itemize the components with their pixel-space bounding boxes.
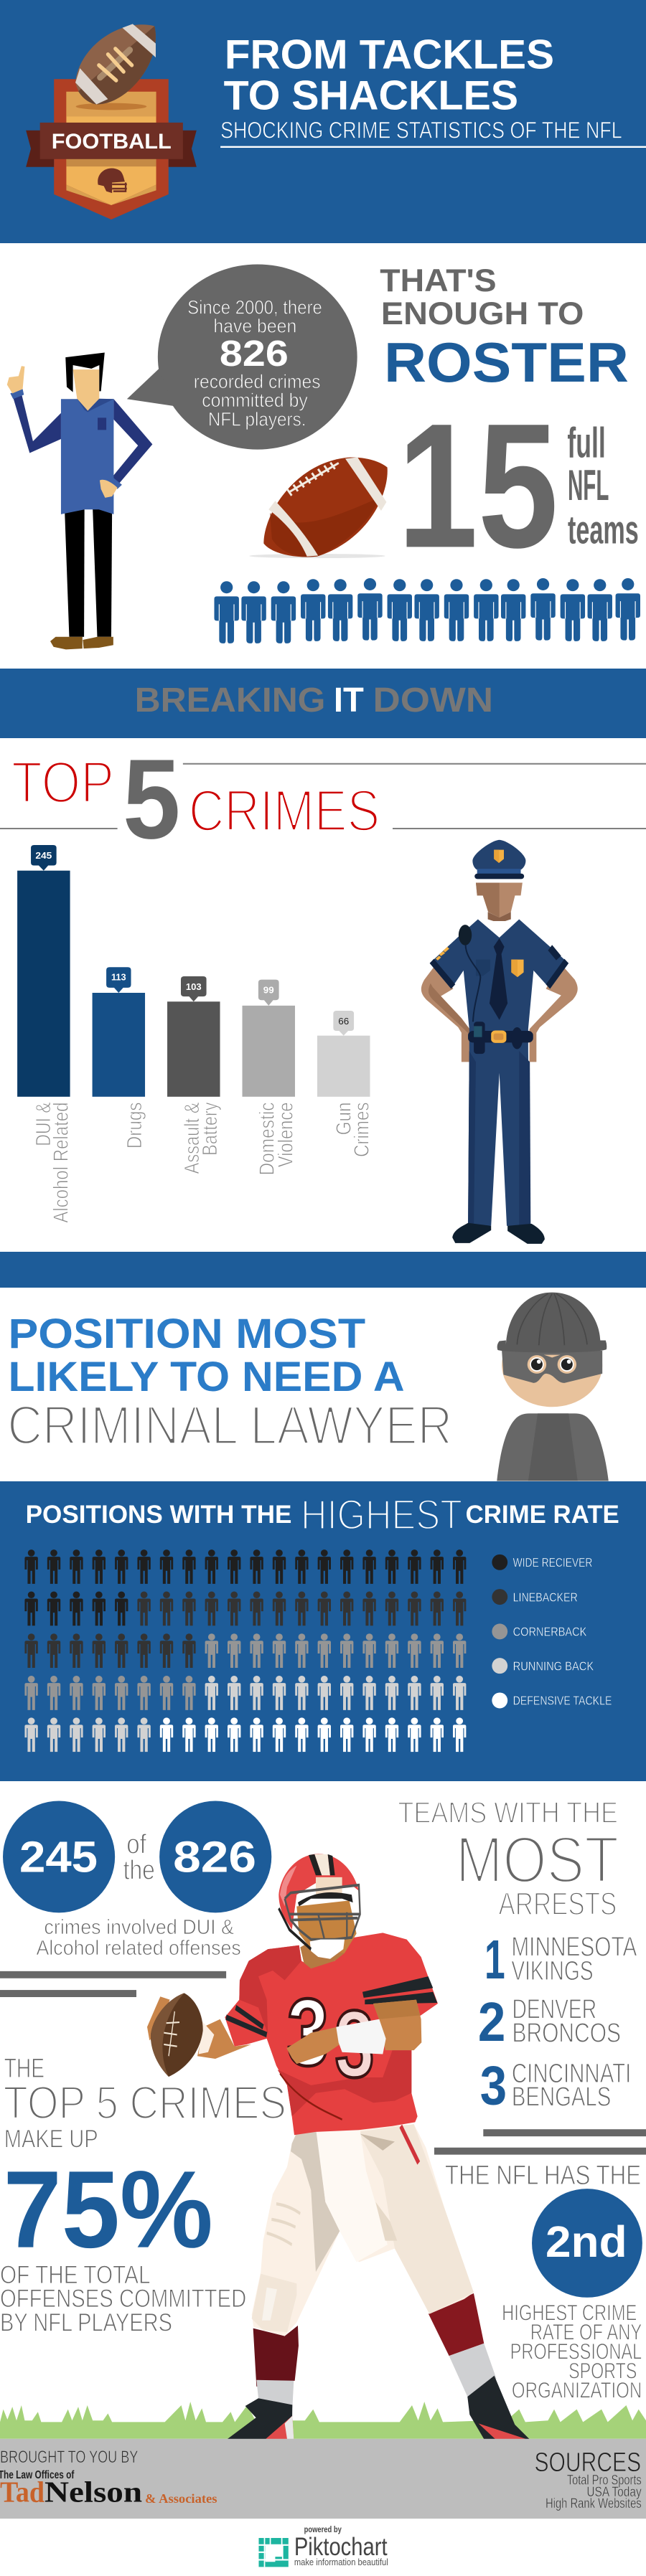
heading: positions with the highest crime rate (26, 1491, 619, 1538)
callout: teams with the most arrests: 3 (480, 2054, 507, 2116)
callout: teams with the most arrests (398, 1797, 646, 2155)
heading: top 5 crimes (11, 736, 380, 862)
full NFL teams: NFL (568, 461, 609, 509)
callout: 245 of the 826: crimes involved DUI & (44, 1917, 234, 1939)
callout: 245 of the 826: 245 (19, 1832, 98, 1882)
logo: powered by Piktochart: make information beautiful (294, 2557, 388, 2568)
heading: breaking it down: DOWN (373, 680, 493, 719)
bar: assault and battery 103: Battery (197, 1102, 221, 1156)
illustration: man in blue shirt (7, 352, 152, 649)
callout: NFL has the 2nd highest crime rate: THE NFL HAS THE (445, 2161, 641, 2191)
legend (492, 1554, 612, 1708)
credit: brought to you by: The Law Offices of (0, 2469, 75, 2481)
illustration: police officer (421, 840, 578, 1244)
icon: football badge (26, 24, 197, 220)
callout: NFL has the 2nd highest crime rate: ORGANIZATION (512, 2378, 642, 2403)
full NFL teams: full (567, 420, 606, 467)
heading: position most likely: LIKELY TO NEED A (8, 1352, 405, 1400)
heading: position most likely: POSITION MOST (8, 1310, 365, 1357)
heading: positions with the highest crime rate: CRIME RATE (466, 1501, 619, 1529)
heading: position most likely: CRIMINAL LAWYER (7, 1395, 452, 1456)
callout: teams with the most arrests: DENVER (512, 1995, 596, 2025)
speech bubble: recorded crimes (194, 371, 321, 392)
panel: positions with highest crime rate (0, 1481, 646, 1781)
callout: top 5 crimes make up 75% (0, 2054, 286, 2336)
heading: breaking it down (135, 680, 493, 719)
bar: domestic violence 99: 99 (263, 984, 274, 995)
callout: NFL has the 2nd highest crime rate (445, 2161, 642, 2403)
callout: 245 of the 826: of (126, 1829, 146, 1859)
callout: top 5 crimes make up 75%: THE (4, 2054, 45, 2084)
callout: teams with the most arrests: BRONCOS (512, 2018, 621, 2048)
panel: footer (0, 2439, 646, 2519)
label: FOOTBALL: FOOTBALL (52, 131, 172, 154)
heading: that's enough to roster: THAT'S (380, 263, 497, 298)
heading: that's enough to roster: ENOUGH TO (381, 296, 584, 331)
bar: DUI and alcohol 245: 245 (35, 850, 52, 861)
sources: SOURCES (534, 2448, 641, 2478)
bar: drugs 113 (93, 967, 146, 1148)
callout: top 5 crimes make up 75%: MAKE UP (4, 2125, 98, 2153)
legend: LINEBACKER (513, 1590, 578, 1605)
heading: positions with the highest crime rate: POSITIONS WITH THE (26, 1501, 291, 1529)
sources: USA Today (586, 2483, 642, 2499)
jersey number: 3 (335, 1991, 375, 2098)
bar: drugs 113: Drugs (122, 1102, 146, 1148)
panel: criminal lawyer (0, 1252, 646, 1481)
callout: 245 of the 826 (0, 1801, 271, 1997)
bar: domestic violence 99: Domestic (255, 1102, 278, 1175)
callout: teams with the most arrests: 1 (484, 1928, 505, 1990)
callout: NFL has the 2nd highest crime rate: 2nd (546, 2217, 627, 2266)
callout: NFL has the 2nd highest crime rate: RATE OF ANY (530, 2320, 642, 2345)
callout: NFL has the 2nd highest crime rate: SPORTS (568, 2359, 637, 2384)
bar: drugs 113: 113 (111, 971, 126, 982)
bar: DUI and alcohol 245: Alcohol Related (49, 1102, 72, 1223)
illustration: burglar (497, 1293, 609, 1481)
speech bubble (127, 264, 357, 450)
heading: breaking it down: BREAKING (135, 680, 325, 719)
sources: High Rank Websites (546, 2496, 642, 2511)
logo: powered by Piktochart: Piktochart (294, 2532, 388, 2561)
credit: brought to you by (0, 2447, 217, 2509)
pictogram: row of 15 players (214, 578, 640, 643)
callout: teams with the most arrests: BENGALS (512, 2082, 611, 2112)
credit: brought to you by: BROUGHT TO YOU BY (0, 2447, 139, 2467)
bar chart: top 5 crimes (17, 845, 373, 1223)
grass (0, 2402, 646, 2439)
bar: gun crimes 66: Gun (332, 1102, 355, 1135)
credit: brought to you by: Nelson (45, 2476, 142, 2509)
heading: top 5 crimes: 5 (123, 736, 180, 862)
title: FROM TACKLES (225, 31, 554, 77)
heading: position most likely (7, 1310, 452, 1456)
logo: powered by Piktochart (258, 2525, 388, 2568)
bar: DUI and alcohol 245 (17, 845, 72, 1223)
panel: header banner (0, 0, 646, 243)
pictogram: position share of 100 players (24, 1549, 466, 1752)
callout: top 5 crimes make up 75%: OFFENSES COMMITTED (0, 2284, 246, 2313)
bar: domestic violence 99: Violence (273, 1102, 297, 1167)
full NFL teams (567, 420, 639, 552)
speech bubble: NFL players. (208, 408, 306, 430)
jersey number (287, 1979, 375, 2098)
callout: teams with the most arrests: TEAMS WITH THE (398, 1797, 618, 1830)
legend: WIDE RECIEVER (513, 1556, 592, 1570)
callout: top 5 crimes make up 75%: BY NFL PLAYERS (0, 2308, 172, 2336)
illustration: quarterback (147, 1854, 530, 2439)
bar: gun crimes 66: Crimes (350, 1102, 373, 1157)
callout: 245 of the 826: 826 (173, 1832, 256, 1882)
title (224, 31, 554, 118)
bar: gun crimes 66: 66 (338, 1016, 349, 1027)
callout: teams with the most arrests: ARRESTS (499, 1886, 617, 1922)
speech bubble: Since 2000, there (187, 296, 322, 319)
callout: top 5 crimes make up 75%: 75% (4, 2148, 213, 2271)
credit: brought to you by: & Associates (145, 2491, 217, 2506)
callout: teams with the most arrests: VIKINGS (511, 1956, 594, 1986)
callout: teams with the most arrests: CINCINNATI (512, 2059, 631, 2089)
callout: teams with the most arrests: MINNESOTA (511, 1933, 637, 1962)
heading: that's enough to roster: ROSTER (384, 332, 629, 395)
bar: domestic violence 99 (243, 980, 297, 1175)
big number 15: 15 (398, 387, 558, 585)
credit: brought to you by: Tad (0, 2476, 45, 2509)
sources (534, 2448, 642, 2511)
bar: assault and battery 103: 103 (186, 981, 202, 992)
logo: powered by Piktochart: powered by (304, 2525, 342, 2534)
callout: teams with the most arrests: MOST (456, 1822, 619, 1897)
speech bubble: 826 (220, 333, 289, 374)
jersey number: 3 (287, 1979, 329, 2086)
heading: top 5 crimes: CRIMES (189, 778, 380, 844)
callout: NFL has the 2nd highest crime rate: HIGHEST CRIME (502, 2301, 637, 2326)
heading: positions with the highest crime rate: HIGHEST (301, 1491, 462, 1538)
speech bubble: have been (213, 315, 296, 337)
icon: football (249, 458, 388, 558)
panel: stats with quarterback (0, 1797, 646, 2568)
callout: 245 of the 826: Alcohol related offenses (37, 1938, 241, 1960)
icon: helmet (98, 169, 127, 193)
bar: DUI and alcohol 245: DUI & (32, 1102, 55, 1146)
bar: assault and battery 103 (167, 976, 221, 1174)
callout: 245 of the 826: the (123, 1855, 155, 1885)
legend: CORNERBACK (513, 1625, 586, 1639)
speech bubble: committed by (202, 390, 308, 411)
title: TO SHACKLES (224, 72, 518, 118)
heading: breaking it down: IT (334, 680, 364, 719)
heading: top 5 crimes: TOP (11, 750, 114, 815)
bar: assault and battery 103: Assault & (180, 1102, 204, 1174)
heading: that's enough to roster (380, 263, 629, 395)
panel: top 5 crimes (0, 736, 646, 1244)
bar: gun crimes 66 (317, 1011, 373, 1157)
callout: top 5 crimes make up 75%: OF THE TOTAL (0, 2260, 151, 2289)
legend: RUNNING BACK (513, 1659, 594, 1674)
callout: top 5 crimes make up 75%: TOP 5 CRIMES (4, 2077, 286, 2129)
sources: Total Pro Sports (567, 2472, 642, 2488)
panel: roster section (7, 263, 640, 649)
panel: breaking it down band (0, 669, 646, 738)
callout: teams with the most arrests: 2 (478, 1991, 505, 2052)
